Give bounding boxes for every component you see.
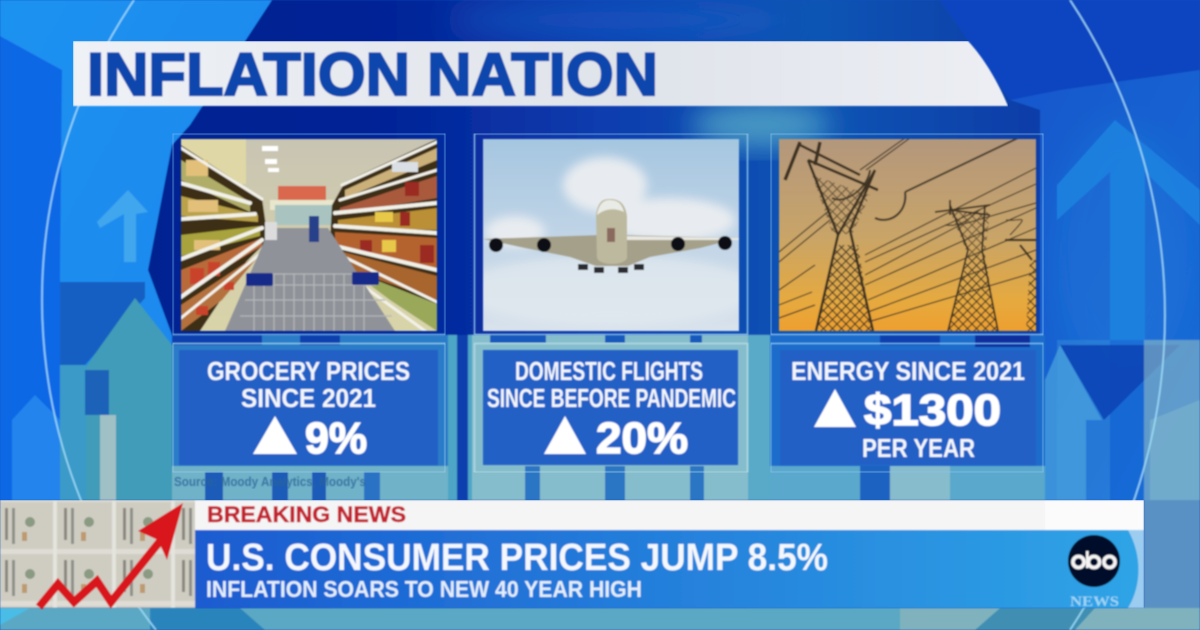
photo: airplane bbox=[482, 138, 740, 332]
pylon 3 bbox=[1005, 240, 1036, 331]
logo: abc news bbox=[1068, 535, 1120, 610]
grocery text: 9% bbox=[305, 414, 367, 463]
energy text bbox=[791, 356, 1025, 463]
energy text: PER YEAR bbox=[862, 433, 975, 463]
label box bbox=[179, 350, 438, 465]
dotted divider bbox=[74, 116, 1016, 120]
grocery text bbox=[207, 356, 410, 463]
title: INFLATION NATION bbox=[87, 41, 658, 108]
icon: red rising arrow bbox=[39, 503, 183, 607]
label box bbox=[483, 350, 738, 465]
source note: Source: Moody Analytics, Moody's bbox=[174, 475, 366, 489]
background arrows bbox=[12, 120, 1200, 500]
flights text: SINCE BEFORE PANDEMIC bbox=[487, 383, 736, 413]
title bbox=[73, 41, 1008, 108]
photo: power pylons bbox=[779, 138, 1036, 331]
breaking news: BREAKING NEWS bbox=[207, 502, 406, 527]
flights text bbox=[487, 356, 736, 463]
white band bbox=[195, 500, 1144, 530]
blue band bbox=[195, 530, 1144, 608]
panel: flights bbox=[460, 134, 760, 472]
photo: grocery aisle bbox=[181, 139, 437, 331]
label box bbox=[780, 350, 1036, 465]
shopping cart bbox=[240, 274, 392, 331]
shelves bbox=[181, 142, 437, 331]
pylon 1 bbox=[785, 142, 878, 331]
vertical stripes bbox=[172, 335, 1030, 500]
goods right bbox=[345, 148, 437, 198]
flights text: DOMESTIC FLIGHTS bbox=[515, 356, 703, 386]
money image bbox=[0, 500, 195, 608]
logo: abc news: NEWS bbox=[1070, 594, 1119, 610]
energy text: $1300 bbox=[864, 386, 1001, 435]
panel: energy bbox=[770, 134, 1044, 472]
energy text: ENERGY SINCE 2021 bbox=[791, 356, 1025, 386]
subheadline: INFLATION SOARS TO NEW 40 YEAR HIGH bbox=[206, 576, 642, 602]
grocery text: SINCE 2021 bbox=[241, 383, 376, 413]
panel: groceries bbox=[172, 134, 446, 472]
lower third bbox=[0, 500, 1144, 610]
headline: U.S. CONSUMER PRICES JUMP 8.5% bbox=[206, 537, 828, 579]
flights text: 20% bbox=[596, 414, 688, 463]
goods left bbox=[181, 160, 250, 212]
grocery text: GROCERY PRICES bbox=[207, 356, 410, 386]
pylon 2 bbox=[935, 200, 998, 331]
